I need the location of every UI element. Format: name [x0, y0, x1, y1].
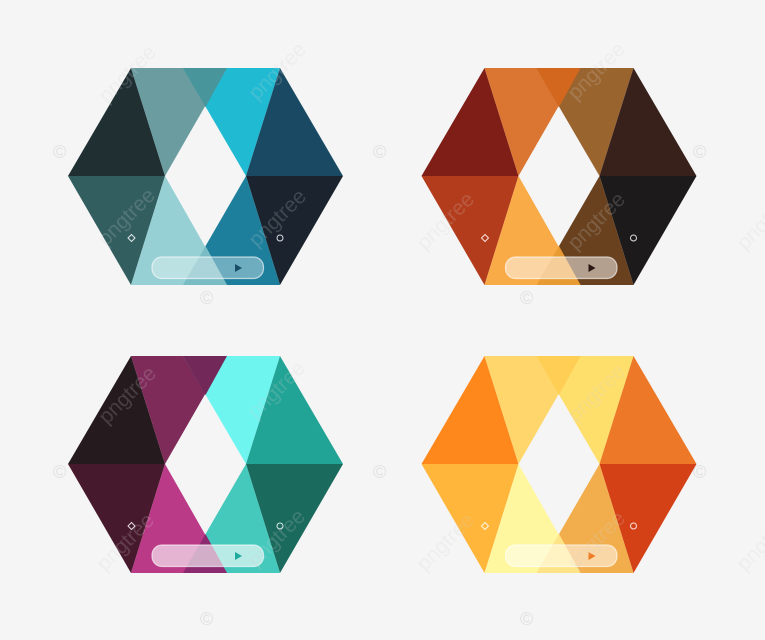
watermarks: ©	[693, 142, 706, 162]
segment: top right	[183, 68, 280, 176]
watermarks: ©	[53, 142, 66, 162]
segment: top right	[536, 356, 634, 464]
watermarks: pngtree	[93, 184, 160, 251]
watermarks: pngtree	[563, 38, 630, 105]
icon: circle marker	[630, 235, 636, 241]
segment: lower left	[68, 176, 165, 285]
segment: bottom overlap	[183, 534, 227, 573]
watermarks: ©	[200, 288, 213, 308]
watermarks: pngtree	[92, 509, 159, 576]
watermarks: pngtree	[563, 188, 630, 255]
segment: top overlap	[536, 356, 580, 395]
icon: diamond marker	[482, 522, 488, 530]
watermarks: ©	[373, 142, 386, 162]
icon: play arrow	[588, 552, 596, 560]
segment: lower right	[246, 176, 343, 285]
watermarks: pngtree	[244, 185, 311, 252]
segment: top overlap	[183, 68, 227, 107]
watermarks: pngtree	[412, 188, 479, 255]
segment: bottom left	[484, 176, 580, 285]
segment: top overlap	[183, 356, 227, 395]
segment: bottom left	[131, 464, 227, 573]
segment: upper right	[600, 68, 696, 176]
segment: bottom left	[484, 464, 580, 573]
segment: lower right	[600, 176, 696, 285]
segment: bottom right	[183, 176, 280, 285]
hexagon: yellow and orange	[422, 356, 696, 573]
button pill	[506, 257, 617, 278]
segment: bottom overlap	[183, 246, 227, 285]
segment: bottom right	[536, 176, 634, 285]
watermarks: ©	[373, 462, 386, 482]
hexagon: teal	[68, 68, 343, 285]
segment: top left	[484, 68, 580, 176]
segment: lower right	[246, 464, 343, 573]
segment: bottom overlap	[536, 534, 580, 573]
hexagon: magenta and turquoise	[68, 356, 343, 573]
watermarks: pngtree	[244, 38, 311, 105]
watermarks: ©	[53, 462, 66, 482]
icon: circle marker	[277, 235, 283, 241]
button pill	[506, 545, 617, 566]
segment: top left	[131, 356, 227, 464]
watermarks: pngtree	[563, 360, 630, 427]
icon: circle marker	[630, 523, 636, 529]
segment: bottom right	[536, 464, 634, 573]
watermarks: ©	[520, 609, 533, 629]
segment: top right	[183, 356, 280, 464]
watermarks: pngtree	[94, 41, 161, 108]
icon: circle marker	[277, 523, 283, 529]
segment: top left	[131, 68, 227, 176]
watermarks: pngtree	[94, 362, 161, 429]
button pill	[152, 257, 264, 278]
segment: upper left	[68, 68, 165, 176]
segment: bottom right	[183, 464, 280, 573]
segment: upper right	[600, 356, 696, 464]
segment: bottom overlap	[536, 246, 580, 285]
segment: lower left	[422, 464, 518, 573]
watermarks: pngtree	[563, 507, 630, 574]
icon: play arrow	[235, 552, 242, 560]
segment: upper left	[422, 356, 518, 464]
icon: play arrow	[235, 264, 242, 272]
watermarks: pngtree	[243, 357, 310, 424]
segment: top right	[536, 68, 634, 176]
segment: lower left	[422, 176, 518, 285]
segment: top left	[484, 356, 580, 464]
segment: bottom left	[131, 176, 227, 285]
button pill	[152, 545, 264, 566]
segment: upper right	[246, 68, 343, 176]
icon: play arrow	[588, 264, 596, 272]
segment: upper right	[246, 356, 343, 464]
icon: diamond marker	[128, 522, 135, 530]
watermarks: ©	[200, 609, 213, 629]
hexagon: orange and brown	[422, 68, 696, 285]
segment: upper left	[68, 356, 165, 464]
segment: lower right	[600, 464, 696, 573]
watermarks: pngtree	[243, 505, 310, 572]
watermarks: ©	[520, 288, 533, 308]
segment: upper left	[422, 68, 518, 176]
segment: lower left	[68, 464, 165, 573]
segment: top overlap	[536, 68, 580, 107]
icon: diamond marker	[128, 234, 135, 242]
watermarks: ©	[693, 462, 706, 482]
watermarks: pngtree	[412, 509, 479, 576]
icon: diamond marker	[482, 234, 488, 242]
